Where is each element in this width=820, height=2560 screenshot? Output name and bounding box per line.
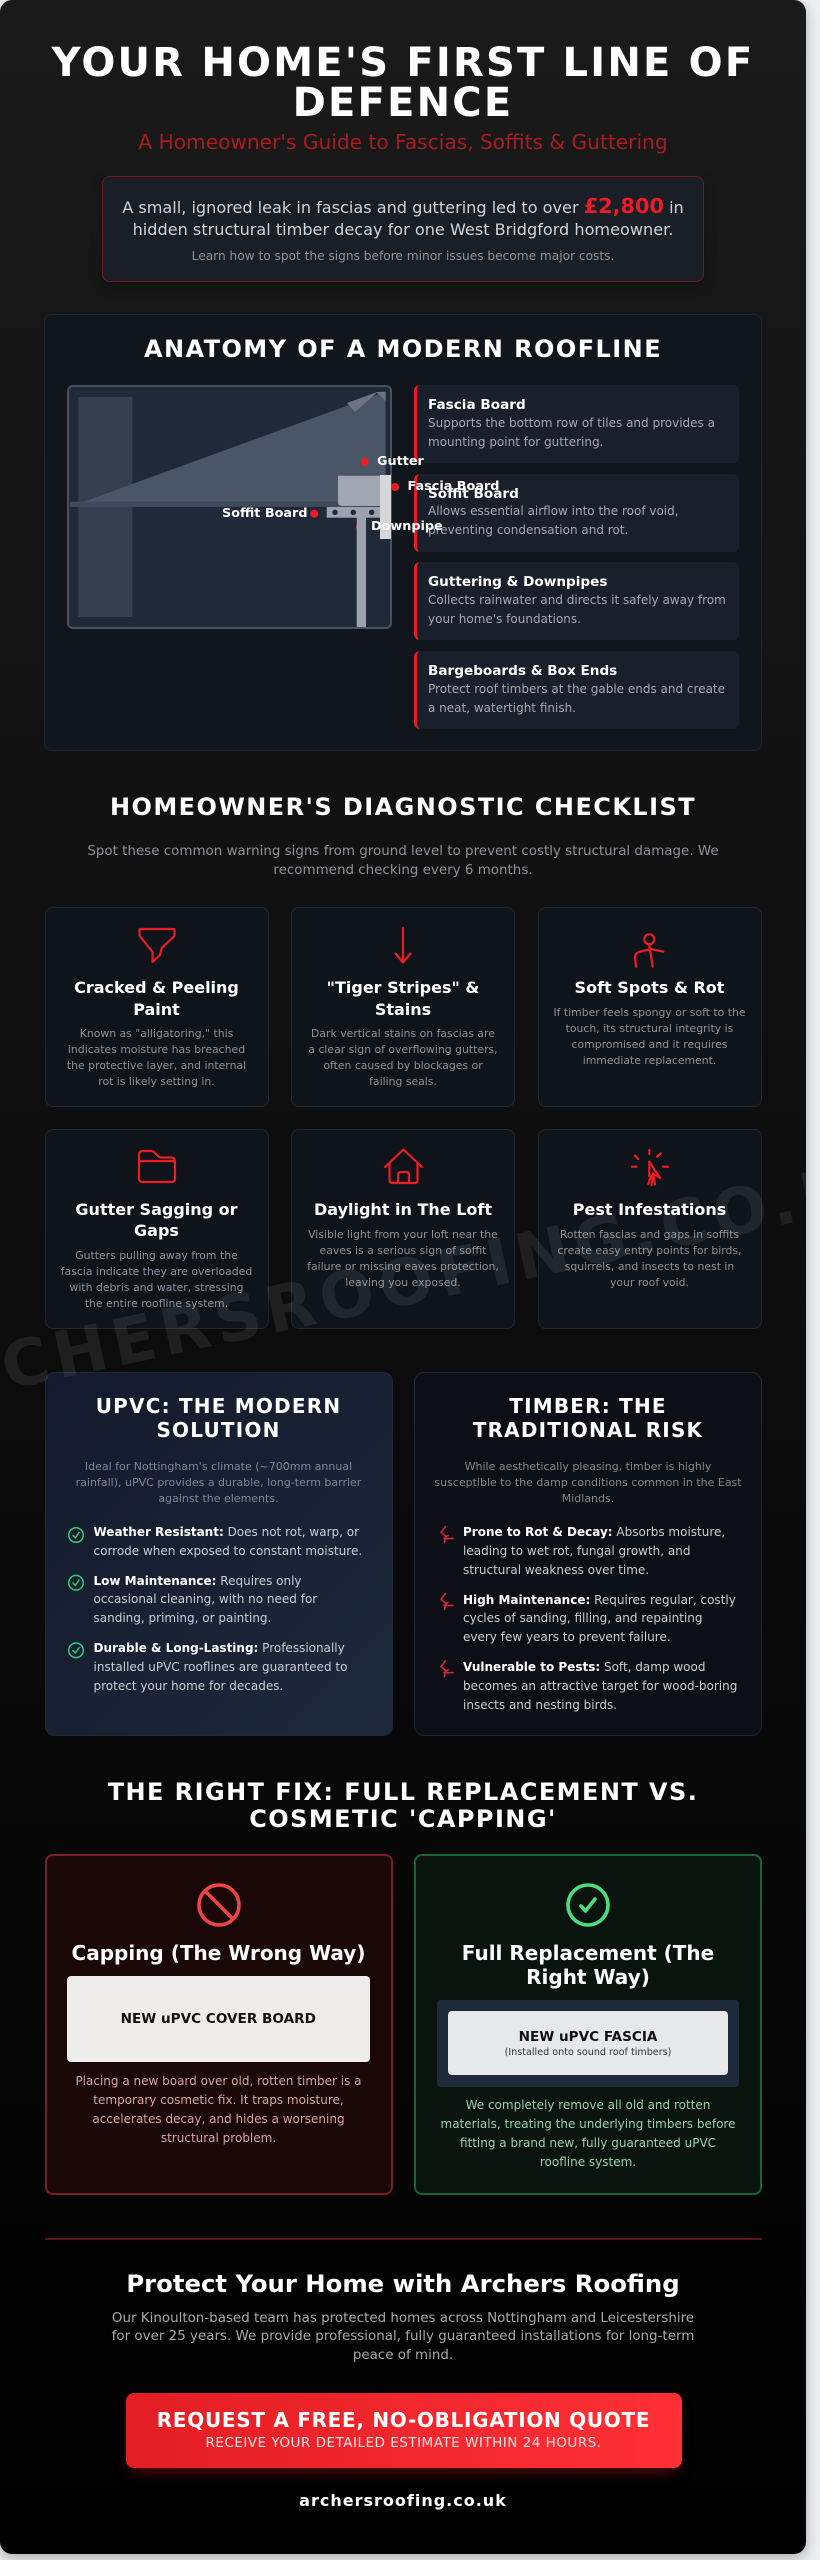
benefit: durable: Durable & Long-Lasting: Professionally bbox=[94, 1641, 345, 1655]
callout note: Learn how to spot the signs before minor issues become major costs. bbox=[192, 249, 614, 263]
board note: (Installed onto sound roof timbers) bbox=[505, 2047, 671, 2058]
risk: maintenance bbox=[463, 1592, 736, 1644]
callout: cost of neglect bbox=[102, 176, 704, 282]
panel title: TRADITIONAL RISK bbox=[473, 1418, 703, 1442]
icon: cursor burst bbox=[632, 1150, 668, 1185]
panel text: roofline system. bbox=[540, 2155, 636, 2169]
panel intro bbox=[76, 1460, 362, 1505]
heading: checklist: HOMEOWNER'S DIAGNOSTIC CHECKLIST bbox=[110, 793, 696, 821]
card text: a clear sign of overflowing gutters, bbox=[308, 1043, 498, 1056]
icon: red warnings bbox=[441, 1526, 453, 1677]
card text: indicates moisture has breached bbox=[68, 1043, 245, 1056]
panel text: We completely remove all old and rotten bbox=[466, 2098, 710, 2112]
panel title: UPVC: THE MODERN bbox=[96, 1394, 341, 1418]
benefit: low maintenance bbox=[94, 1574, 318, 1625]
checklist intro: Spot these common warning signs from ground level to prevent costly structural damage. We bbox=[87, 844, 719, 859]
card text: with debris and water, stressing bbox=[70, 1281, 243, 1294]
callout text: A small, ignored leak in fascias and guttering led to over £2,800 in bbox=[122, 194, 684, 218]
card title: Paint bbox=[133, 1000, 180, 1018]
risk: pests bbox=[463, 1660, 737, 1712]
card text: failing seals. bbox=[369, 1075, 437, 1088]
CTA title: REQUEST A FREE, NO-OBLIGATION QUOTE bbox=[157, 2408, 650, 2432]
panel title bbox=[96, 1394, 341, 1442]
panel text bbox=[75, 2074, 362, 2145]
card text: eaves is a serious sign of soffit bbox=[320, 1244, 486, 1257]
info card: bargeboards: Protect roof timbers at the gable ends and create bbox=[428, 682, 725, 696]
panel intro: While aesthetically pleasing, timber is highly bbox=[465, 1460, 711, 1472]
panel text: temporary cosmetic fix. It traps moisture, bbox=[93, 2093, 344, 2107]
info card: fascia bbox=[414, 385, 739, 463]
check card: soft spots bbox=[538, 907, 762, 1107]
check card: daylight bbox=[291, 1128, 515, 1328]
title: YOUR HOME'S FIRST LINE OF bbox=[52, 40, 754, 86]
benefit: weather resistant: corrode when exposed to constant moisture. bbox=[94, 1544, 362, 1558]
risk: pests: becomes an attractive target for wood-boring bbox=[463, 1679, 737, 1693]
info card: fascia: mounting point for guttering. bbox=[428, 434, 603, 448]
risk: pests: insects and nesting birds. bbox=[463, 1698, 617, 1712]
info card: bargeboards: a neat, watertight finish. bbox=[428, 700, 576, 714]
card text: create easy entry points for birds, bbox=[557, 1244, 742, 1257]
card text: compromised and it requires bbox=[572, 1038, 727, 1051]
benefit: durable: protect your home for decades. bbox=[94, 1679, 283, 1693]
risk: rot: leading to wet rot, fungal growth, and bbox=[463, 1544, 690, 1558]
panel text: materials, treating the underlying timbers before bbox=[441, 2117, 735, 2131]
card title: Gaps bbox=[134, 1221, 179, 1240]
CTA button bbox=[126, 2392, 682, 2468]
benefit: weather resistant bbox=[94, 1525, 362, 1558]
benefit: durable bbox=[94, 1641, 347, 1693]
card text: squirrels, and insects to nest in bbox=[565, 1260, 734, 1273]
info card: soffit: preventing condensation and rot. bbox=[428, 523, 628, 537]
board label: NEW uPVC COVER BOARD bbox=[121, 2011, 316, 2027]
panel text bbox=[441, 2098, 735, 2169]
card text: Rotten fascias and gaps in soffits bbox=[560, 1228, 739, 1240]
risk: maintenance: cycles of sanding, filling, and repainting bbox=[463, 1611, 703, 1625]
card text: Gutters pulling away from the bbox=[75, 1248, 238, 1262]
icon: check circle bbox=[566, 1883, 610, 1927]
risk: rot: structural weakness over time. bbox=[463, 1563, 649, 1577]
panel intro: susceptible to the damp conditions common in the East bbox=[434, 1476, 742, 1489]
footer text: peace of mind. bbox=[353, 2348, 453, 2363]
benefit: low maintenance: occasional cleaning, with no need for bbox=[94, 1592, 317, 1606]
panel title: Right Way) bbox=[526, 1965, 650, 1989]
panel title bbox=[462, 1941, 714, 1989]
card text: Known as "alligatoring," this bbox=[80, 1027, 233, 1040]
benefit: weather resistant: Weather Resistant: Does not rot, warp, or bbox=[94, 1525, 359, 1539]
panel intro bbox=[434, 1460, 742, 1505]
check card: pests bbox=[538, 1128, 762, 1328]
info card: soffit bbox=[414, 474, 739, 552]
panel intro: Midlands. bbox=[562, 1492, 614, 1505]
card title bbox=[74, 978, 239, 1018]
panel title: SOLUTION bbox=[156, 1418, 281, 1442]
card title: Gutter Sagging or bbox=[75, 1200, 238, 1218]
card text bbox=[553, 1006, 746, 1067]
card text bbox=[61, 1248, 252, 1310]
icon: house bbox=[385, 1150, 422, 1183]
icon: prohibited bbox=[197, 1883, 241, 1927]
risk: pests: Vulnerable to Pests: Soft, damp wood bbox=[463, 1660, 705, 1674]
comparison icons bbox=[68, 1526, 454, 1678]
icon: green checks bbox=[69, 1528, 83, 1658]
heading: the right fix bbox=[108, 1778, 698, 1833]
new fascia board bbox=[448, 2011, 728, 2075]
panel text: Placing a new board over old, rotten timber is a bbox=[75, 2074, 362, 2088]
info card: fascia: Supports the bottom row of tiles and provides a bbox=[428, 416, 715, 430]
icon: folder bbox=[139, 1151, 175, 1182]
panel: full replacement bbox=[414, 1854, 762, 2195]
risk: rot: Prone to Rot & Decay: Absorbs moisture, bbox=[463, 1525, 725, 1539]
risk: maintenance: every few years to prevent failure. bbox=[463, 1630, 671, 1644]
risk: maintenance: High Maintenance: Requires regular, costly bbox=[463, 1592, 736, 1606]
card text bbox=[308, 1027, 498, 1088]
card text: If timber feels spongy or soft to the bbox=[553, 1006, 746, 1019]
title: DEFENCE bbox=[293, 80, 513, 126]
cover board graphic bbox=[67, 1976, 370, 2062]
panel: uPVC bbox=[44, 1372, 393, 1736]
website: archersroofing.co.uk bbox=[299, 2490, 507, 2510]
heading: the right fix: COSMETIC 'CAPPING' bbox=[249, 1805, 557, 1833]
info card: bargeboards: Bargeboards & Box Ends bbox=[428, 663, 617, 679]
check card: tiger stripes bbox=[291, 907, 515, 1107]
card title: Soft Spots & Rot bbox=[575, 978, 724, 997]
card title: Daylight in The Loft bbox=[314, 1200, 492, 1218]
panel text: accelerates decay, and hides a worsening bbox=[92, 2112, 345, 2126]
panel title bbox=[472, 1394, 703, 1442]
divider bbox=[44, 2238, 762, 2240]
benefit: low maintenance: Low Maintenance: Requires only bbox=[94, 1574, 302, 1588]
icon: down arrow bbox=[396, 928, 410, 962]
panel intro: rainfall), uPVC provides a durable, long-term barrier bbox=[76, 1476, 361, 1489]
checklist intro: recommend checking every 6 months. bbox=[273, 863, 533, 878]
subtitle: A Homeowner's Guide to Fascias, Soffits & Guttering bbox=[138, 130, 668, 154]
card text: touch, its structural integrity is bbox=[566, 1022, 733, 1035]
icon: funnel bbox=[140, 929, 174, 962]
heading: anatomy: ANATOMY OF A MODERN ROOFLINE bbox=[144, 335, 662, 363]
panel intro: against the elements. bbox=[158, 1492, 279, 1505]
info card: fascia: Fascia Board bbox=[428, 397, 526, 413]
info card: guttering: Guttering & Downpipes bbox=[428, 574, 607, 590]
footer heading: Protect Your Home with Archers Roofing bbox=[126, 2269, 680, 2298]
panel: timber bbox=[414, 1372, 762, 1736]
footer text bbox=[112, 2310, 694, 2363]
card text bbox=[557, 1228, 742, 1289]
panel text: fitting a brand new, fully guaranteed uPVC bbox=[460, 2136, 716, 2150]
label: downpipe: Downpipe bbox=[371, 519, 443, 534]
callout text: hidden structural timber decay for one West Bridgford homeowner. bbox=[133, 220, 673, 239]
card text: Dark vertical stains on fascias are bbox=[311, 1027, 495, 1040]
panel title: TIMBER: THE bbox=[509, 1394, 667, 1418]
card title bbox=[327, 978, 479, 1018]
checklist icons bbox=[138, 926, 670, 1186]
card text: leaving you exposed. bbox=[345, 1276, 461, 1289]
footer text: for over 25 years. We provide professional, fully guaranteed installations for long-term bbox=[112, 2329, 694, 2344]
label: soffit board: Soffit Board bbox=[222, 506, 308, 521]
callout text bbox=[122, 194, 684, 239]
icon: person bbox=[635, 934, 663, 967]
CTA subtitle: RECEIVE YOUR DETAILED ESTIMATE WITHIN 24 HOURS. bbox=[205, 2434, 602, 2450]
card title: "Tiger Stripes" & bbox=[327, 978, 479, 997]
board label: NEW uPVC FASCIA bbox=[519, 2029, 657, 2045]
panel: capping bbox=[44, 1854, 392, 2195]
info card: guttering: Collects rainwater and directs it safely away from bbox=[428, 593, 726, 607]
card text: often caused by blockages or bbox=[323, 1059, 483, 1072]
check card: gutter sagging bbox=[44, 1128, 268, 1328]
title bbox=[51, 40, 754, 126]
card text: the entire roofline system. bbox=[85, 1297, 228, 1310]
card text: failure or missing eaves protection, bbox=[307, 1260, 499, 1273]
info card: guttering bbox=[414, 562, 739, 640]
panel intro: Ideal for Nottingham's climate (~700mm annual bbox=[85, 1460, 352, 1472]
benefit: durable: installed uPVC rooflines are guaranteed to bbox=[94, 1660, 347, 1674]
card text: fascia indicate they are overloaded bbox=[61, 1265, 252, 1278]
info card: soffit: Soffit Board bbox=[428, 486, 519, 502]
card title: Cracked & Peeling bbox=[74, 978, 239, 997]
fascia graphic bbox=[437, 2000, 739, 2087]
card text: your roof void. bbox=[610, 1276, 689, 1289]
info card: bargeboards bbox=[414, 651, 739, 729]
card text bbox=[307, 1228, 499, 1289]
info card: soffit: Allows essential airflow into the roof void, bbox=[428, 504, 679, 518]
panel title: Full Replacement (The bbox=[462, 1941, 714, 1965]
label: gutter: Gutter bbox=[377, 454, 424, 469]
card text bbox=[67, 1027, 246, 1088]
footer text: Our Kinoulton-based team has protected homes across Nottingham and Leicestershire bbox=[112, 2310, 694, 2326]
card title: Pest Infestations bbox=[573, 1200, 726, 1218]
info card: guttering: your home's foundations. bbox=[428, 612, 581, 626]
benefit: low maintenance: sanding, priming, or painting. bbox=[94, 1611, 271, 1625]
label: fascia board: Fascia Board bbox=[408, 479, 499, 494]
check card: cracked paint bbox=[44, 907, 268, 1107]
roofline diagram bbox=[67, 385, 399, 629]
card text: rot is likely setting in. bbox=[98, 1075, 215, 1088]
panel text: structural problem. bbox=[161, 2131, 276, 2145]
panel: anatomy bbox=[44, 314, 762, 751]
checklist intro bbox=[87, 844, 719, 878]
card text: immediate replacement. bbox=[583, 1054, 716, 1067]
panel title: Capping (The Wrong Way) bbox=[72, 1941, 365, 1965]
card title bbox=[75, 1200, 238, 1240]
card title: Stains bbox=[375, 1000, 431, 1018]
risk: rot bbox=[463, 1525, 725, 1577]
card text: Visible light from your loft near the bbox=[308, 1228, 498, 1240]
card text: the protective layer, and internal bbox=[67, 1059, 246, 1072]
heading: the right fix: THE RIGHT FIX: FULL REPLACEMENT VS. bbox=[108, 1778, 698, 1806]
